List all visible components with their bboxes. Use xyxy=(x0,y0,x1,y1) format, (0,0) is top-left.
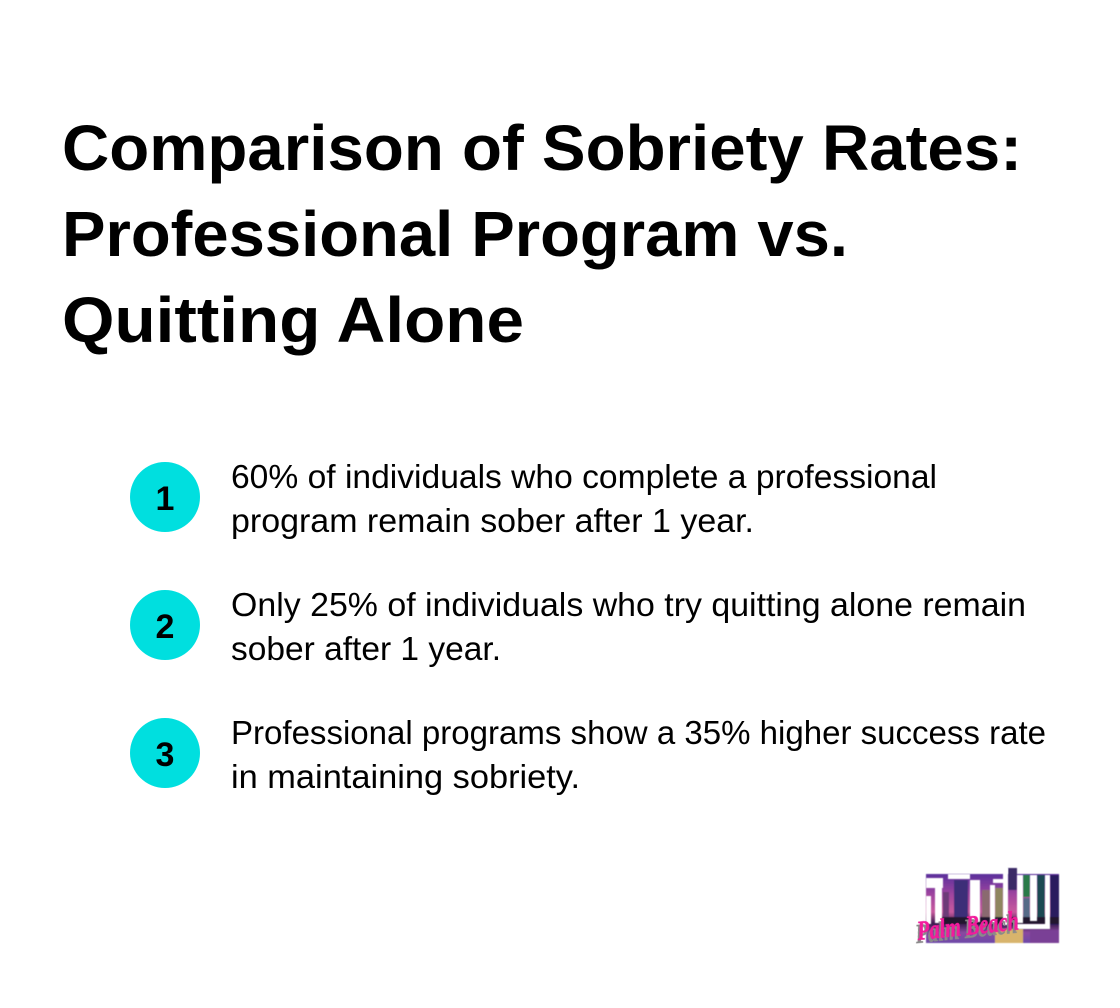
item 3 text xyxy=(231,714,1046,795)
item 2 text: Only 25% of individuals who try quitting alone remain xyxy=(231,586,1026,623)
item 3 text: Professional programs show a 35% higher success rate xyxy=(231,714,1046,751)
item 2 text: sober after 1 year. xyxy=(231,630,501,667)
item 1 text: program remain sober after 1 year. xyxy=(231,502,754,539)
logo: Amity Palm Beach xyxy=(915,868,1059,946)
list item 2 xyxy=(130,586,1026,667)
title: Comparison of Sobriety Rates: xyxy=(62,112,1022,184)
logo script text: Palm Beach xyxy=(915,905,1020,946)
item 1 text xyxy=(231,458,937,539)
badge 2: 2 xyxy=(156,608,174,646)
title xyxy=(62,112,1022,356)
item 2 text xyxy=(231,586,1026,667)
list item 1 xyxy=(130,458,937,539)
logo skyline panel xyxy=(926,868,1059,943)
badge 1 xyxy=(130,462,200,532)
badge 2 xyxy=(130,590,200,660)
badge 1: 1 xyxy=(156,480,174,518)
title: Quitting Alone xyxy=(62,284,524,356)
badge 3 xyxy=(130,718,200,788)
item 3 text: in maintaining sobriety. xyxy=(231,758,580,795)
logo white letter cut-outs xyxy=(926,868,1050,929)
list item 3 xyxy=(130,714,1046,795)
badge 3: 3 xyxy=(156,736,174,774)
item 1 text: 60% of individuals who complete a professional xyxy=(231,458,937,495)
title: Professional Program vs. xyxy=(62,198,848,270)
